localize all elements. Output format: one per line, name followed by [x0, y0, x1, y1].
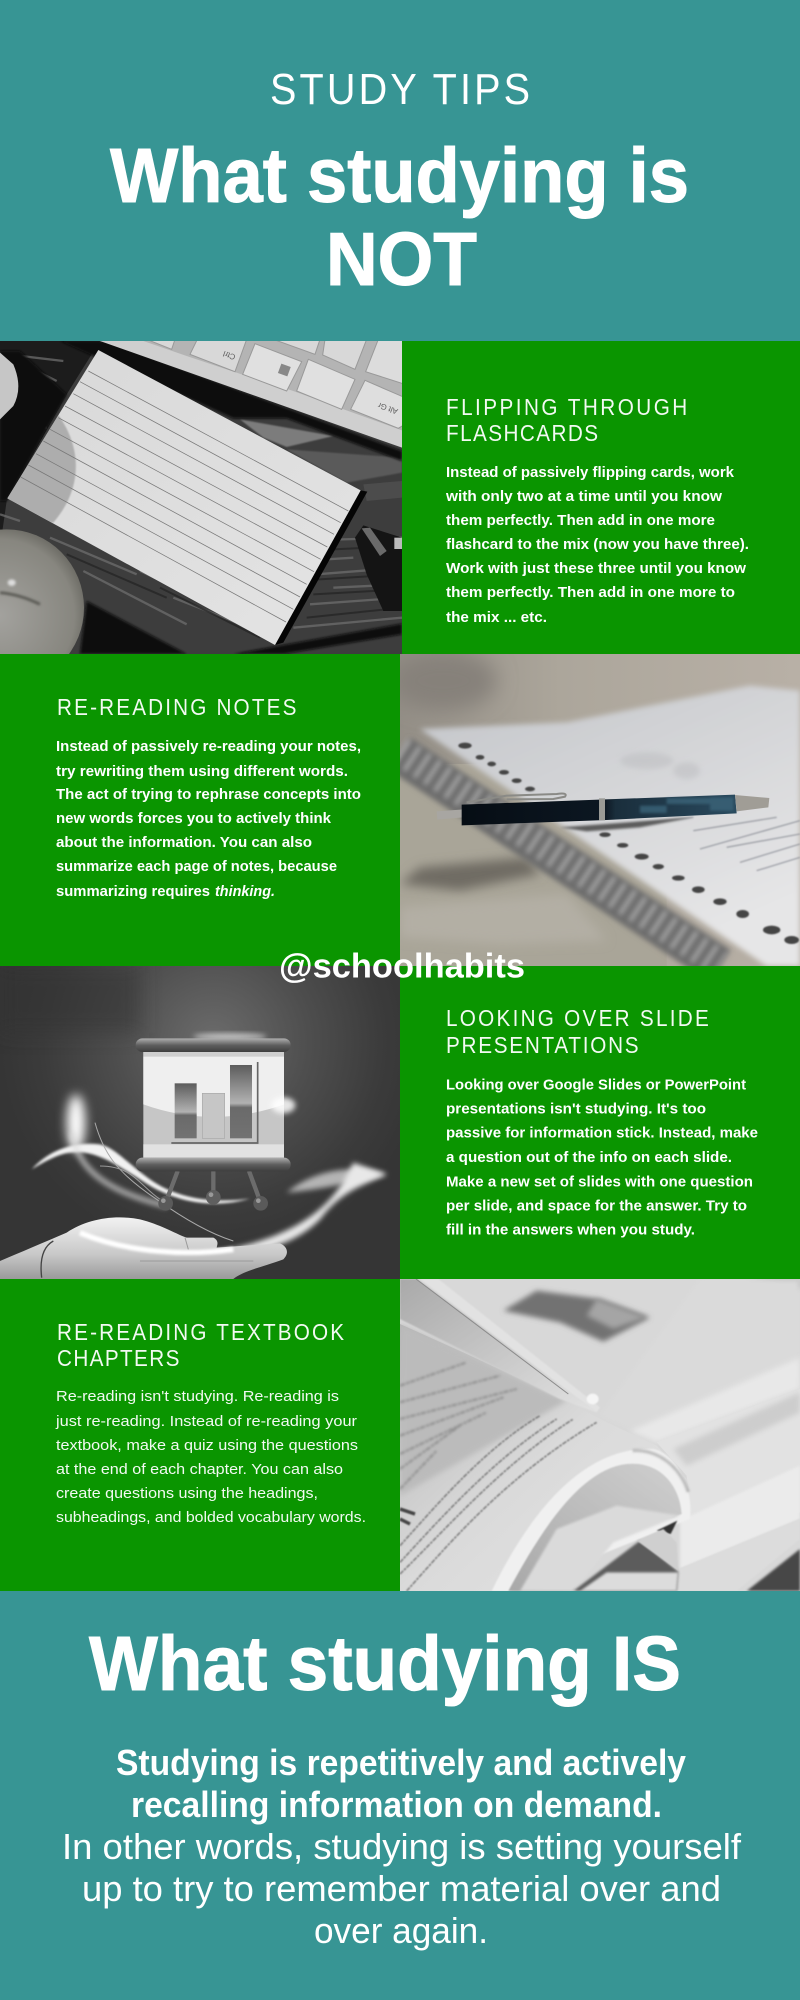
panel body text: fill in the answers when you study.: [446, 1222, 695, 1238]
panel body text: new words forces you to actively think: [56, 811, 332, 827]
keyboard: Alt Gr: [376, 400, 399, 416]
keyboard: [100, 339, 405, 448]
panel body text: them perfectly. Then add in one more: [446, 513, 715, 529]
panel heading: [446, 1005, 709, 1058]
panel body text: textbook, make a quiz using the questions: [56, 1438, 358, 1454]
hand: [0, 1217, 287, 1279]
panel body text: Re-reading isn't studying. Re-reading is: [56, 1389, 339, 1405]
panel background: [400, 966, 800, 1279]
explanation text: over again.: [314, 1910, 488, 1951]
panel body text: passive for information stick. Instead, make: [446, 1126, 758, 1142]
eyebrow: study tips: STUDY TIPS: [270, 64, 530, 113]
panel heading: CHAPTERS: [57, 1345, 179, 1371]
definition text, bold: [116, 1742, 686, 1825]
panel heading: [446, 394, 687, 446]
panel body text: [56, 739, 361, 900]
panel: looking over slide presentations: [400, 966, 800, 1279]
panel body text: per slide, and space for the answer. Try to: [446, 1198, 747, 1214]
photo: index card and keyboard: [0, 341, 402, 654]
panel heading: RE-READING NOTES: [57, 694, 296, 720]
panel body text: [445, 465, 749, 626]
panel body text: Instead of passively flipping cards, work: [446, 465, 735, 481]
panel background: [0, 654, 400, 966]
heading: NOT: NOT: [326, 217, 477, 301]
panel body text: Instead of passively re-reading your notes,: [56, 739, 361, 755]
panel body text: The act of trying to rephrase concepts into: [56, 787, 361, 803]
panel body text: create questions using the headings,: [56, 1486, 318, 1502]
panel: re-reading textbook chapters: [0, 1279, 400, 1591]
explanation text: [62, 1826, 742, 1951]
panel body text: Work with just these three until you know: [446, 561, 747, 577]
panel background: [0, 1279, 400, 1591]
panel body text: [55, 1389, 366, 1526]
watermark: schoolhabits handle: @schoolhabits: [279, 948, 525, 986]
panel heading: LOOKING OVER SLIDE: [446, 1005, 709, 1031]
heading: what studying is: What studying is: [110, 133, 689, 219]
photo: presentation board over hand: [0, 966, 400, 1279]
keyboard: Ctrl: [222, 349, 237, 362]
explanation text: up to try to remember material over and: [82, 1868, 721, 1909]
heading: what studying is: What studying IS: [89, 1621, 681, 1707]
page block arch: [492, 1449, 691, 1591]
panel body text: flashcard to the mix (now you have three).: [446, 537, 749, 553]
panel: re-reading notes: [0, 654, 400, 966]
panel body text: subheadings, and bolded vocabulary words.: [56, 1510, 366, 1526]
definition text, bold: recalling information on demand.: [131, 1784, 662, 1825]
panel: what studying is: [0, 1591, 800, 2000]
panel body text: try rewriting them using different words.: [56, 764, 348, 780]
panel body text: with only two at a time until you know: [445, 489, 723, 505]
panel body text: at the end of each chapter. You can also: [56, 1462, 343, 1478]
board screen: [143, 1052, 284, 1158]
panel heading: PRESENTATIONS: [446, 1032, 639, 1058]
panel body text: thinking.: [215, 884, 275, 900]
definition text, bold: Studying is repetitively and actively: [116, 1742, 686, 1783]
panel heading: [57, 1319, 344, 1371]
panel background: [402, 341, 800, 654]
panel: flipping through flashcards: [402, 341, 800, 654]
header title block: [110, 64, 689, 301]
panel body text: summarize each page of notes, because: [56, 859, 337, 875]
easel legs: [166, 1171, 260, 1198]
panel body text: [446, 1078, 758, 1238]
light swooshes: [32, 1094, 387, 1253]
panel body text: a question out of the info on each slide.: [446, 1150, 732, 1166]
panel heading: RE-READING TEXTBOOK: [57, 1319, 344, 1345]
panel body text: presentations isn't studying. It's too: [446, 1102, 706, 1118]
photo: pen on spiral notebook: [390, 651, 800, 966]
photo: open book: [400, 1279, 800, 1591]
panel: header background: [0, 0, 800, 341]
panel body text: Make a new set of slides with one question: [446, 1174, 753, 1190]
panel body text: Looking over Google Slides or PowerPoint: [446, 1078, 746, 1094]
panel heading: FLIPPING THROUGH: [446, 394, 687, 420]
panel heading: FLASHCARDS: [446, 420, 598, 446]
panel body text: about the information. You can also: [56, 835, 312, 851]
panel background: [0, 1591, 800, 2000]
panel body text: the mix ... etc.: [446, 610, 547, 626]
printed text lines: [400, 1362, 517, 1489]
panel body text: just re-reading. Instead of re-reading your: [55, 1414, 357, 1430]
panel body text: summarizing requires: [56, 884, 210, 900]
explanation text: In other words, studying is setting yourself: [62, 1826, 742, 1867]
panel body text: them perfectly. Then add in one more to: [446, 585, 735, 601]
